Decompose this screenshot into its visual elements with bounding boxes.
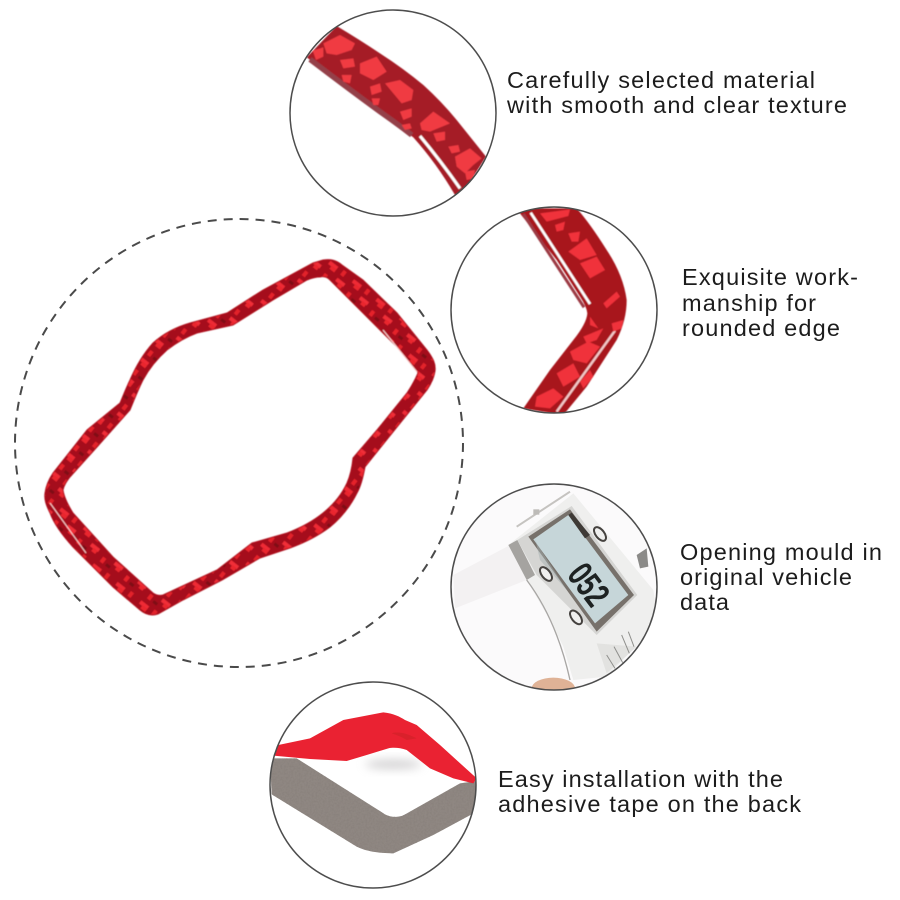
caption: workmanship — [682, 264, 858, 341]
caption: material: with smooth and clear texture — [506, 92, 847, 118]
panel: vehicle data measurement — [447, 483, 882, 699]
caption: vehicle data: original vehicle — [680, 564, 852, 590]
LCD reading: 052 — [559, 556, 617, 614]
panel: main product view in dashed circle — [15, 219, 463, 667]
product photo: red carbon fibre frame — [45, 260, 435, 615]
caption: material: Carefully selected material — [507, 67, 815, 93]
caption: installation — [498, 766, 801, 817]
caption: workmanship: rounded edge — [682, 315, 840, 341]
caption: installation: Easy installation with the — [498, 766, 783, 792]
caption: vehicle data — [680, 539, 882, 615]
caption: material — [506, 67, 847, 118]
photo: digital caliper — [454, 490, 655, 690]
caption: workmanship: manship for — [682, 290, 816, 316]
photo: adhesive tape back — [270, 712, 477, 853]
panel: workmanship detail — [451, 207, 858, 415]
caption: installation: adhesive tape on the back — [498, 791, 801, 817]
photo: rounded edge close up — [520, 208, 627, 415]
caption: vehicle data: Opening mould in — [680, 539, 882, 565]
caption: workmanship: Exquisite work- — [682, 264, 858, 290]
caption: vehicle data: data — [680, 589, 730, 615]
photo: carbon fibre close up — [307, 26, 486, 195]
panel: material detail — [290, 10, 847, 216]
panel: adhesive installation — [270, 682, 801, 888]
